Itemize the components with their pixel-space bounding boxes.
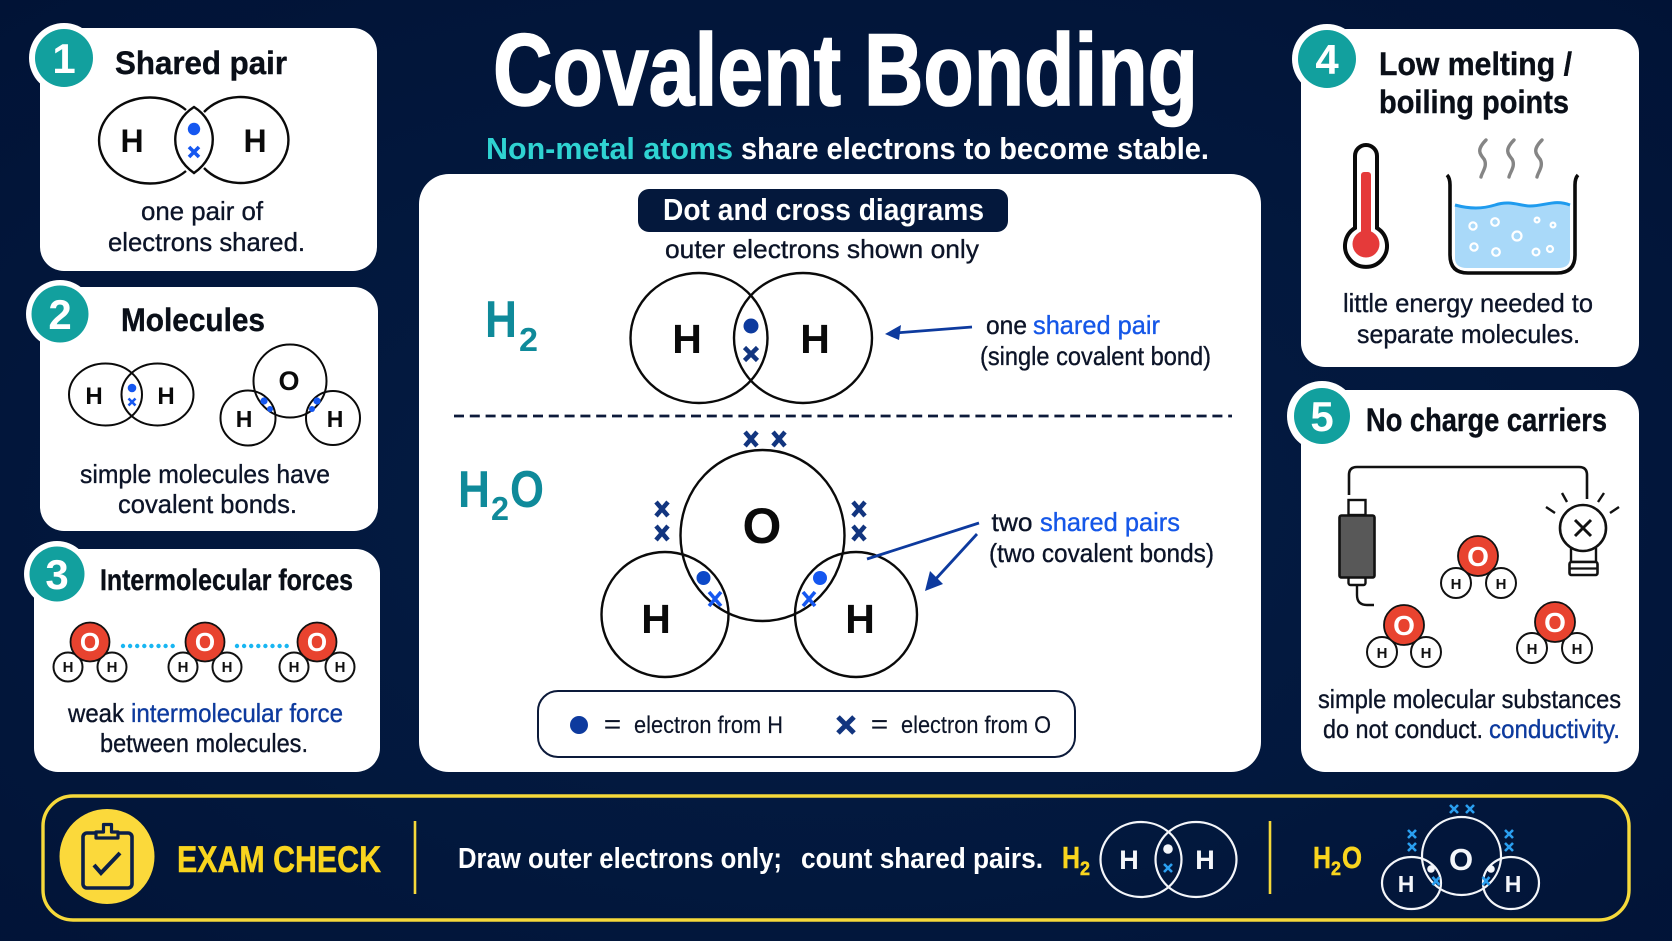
label: H2O bbox=[458, 461, 544, 527]
molecules: water: O bbox=[1393, 610, 1415, 641]
subtitle bbox=[486, 131, 1209, 166]
heading: low melting: boiling points bbox=[1379, 84, 1569, 120]
panel: 5 no charge carriers bbox=[1287, 381, 1639, 772]
label: H2: H bbox=[485, 291, 517, 349]
text: weak force bbox=[67, 698, 343, 758]
legend: electron from H bbox=[634, 712, 783, 739]
label: H2O: 2 bbox=[491, 490, 509, 527]
text: weak force: weak bbox=[67, 698, 125, 728]
badge 4: 4 bbox=[1315, 36, 1339, 83]
annotation: one shared pair bbox=[980, 310, 1211, 371]
annotation: one shared pair: one bbox=[986, 310, 1027, 340]
label: H2O: O bbox=[510, 461, 544, 519]
heading: low melting: Low melting / bbox=[1379, 46, 1572, 82]
diagram: mini H2O: H bbox=[1505, 871, 1521, 897]
text: little energy bbox=[1343, 288, 1593, 349]
diagram: small H2O bbox=[220, 344, 360, 446]
panel: 3 intermolecular forces bbox=[24, 541, 380, 772]
legend: electron from O bbox=[901, 712, 1051, 739]
text: little energy: little energy needed to bbox=[1343, 288, 1593, 318]
diagram: H2O dot and cross: H bbox=[641, 596, 671, 642]
heading: molecules: Molecules bbox=[121, 302, 265, 338]
icon: steam bbox=[1480, 140, 1542, 177]
molecules: water: H bbox=[1377, 645, 1387, 662]
diagram: small H2 bbox=[69, 364, 194, 426]
label: H2O yellow: O bbox=[1342, 840, 1362, 875]
molecules row with dotted forces: O bbox=[307, 627, 327, 657]
molecules row with dotted forces bbox=[54, 622, 354, 682]
diagram: H2O dot and cross bbox=[602, 432, 917, 677]
text: weak force: intermolecular force bbox=[131, 698, 343, 728]
text: do not conduct: conductivity. bbox=[1489, 714, 1620, 744]
label: H2O: H bbox=[458, 461, 490, 519]
heading: low melting bbox=[1379, 46, 1572, 120]
diagram: small H2: H bbox=[157, 383, 175, 410]
annotation: two shared pairs: (two covalent bonds) bbox=[989, 538, 1214, 568]
diagram: mini H2O bbox=[1382, 805, 1539, 909]
circuit wire bbox=[1349, 467, 1587, 499]
label: H2 bbox=[485, 291, 538, 358]
annotation: two shared pairs: two bbox=[992, 507, 1032, 537]
arrow: to H2 shared pair bbox=[885, 325, 972, 340]
diagram: small H2O: H bbox=[327, 406, 343, 432]
molecules: water: O bbox=[1467, 541, 1489, 572]
caption: outer electrons: outer electrons shown only bbox=[665, 234, 979, 264]
annotation: one shared pair: (single covalent bond) bbox=[980, 341, 1211, 371]
diagram: mini H2 bbox=[1100, 822, 1236, 897]
label: H2 yellow bbox=[1062, 840, 1090, 880]
diagram: mini H2O: H bbox=[1398, 871, 1414, 897]
text: simple molecules: covalent bonds. bbox=[118, 489, 297, 519]
text: weak force: between molecules. bbox=[100, 728, 308, 758]
molecules row with dotted forces: H bbox=[178, 659, 188, 676]
text: one pair: one pair of bbox=[141, 196, 264, 226]
molecules row with dotted forces: H bbox=[222, 659, 232, 676]
text: exam instructions bbox=[458, 843, 1043, 875]
badge 1 bbox=[29, 23, 99, 93]
exam check bar bbox=[43, 796, 1629, 920]
diagram: H2O dot and cross: O bbox=[743, 498, 781, 554]
text: one pair bbox=[108, 196, 305, 257]
legend bbox=[538, 691, 1075, 757]
panel: 2 molecules bbox=[26, 280, 378, 531]
annotation: two shared pairs bbox=[989, 507, 1214, 568]
heading: intermolecular forces: Intermolecular forces bbox=[100, 564, 353, 597]
annotation: two shared pairs: shared pairs bbox=[1040, 507, 1180, 537]
text: simple molecules: simple molecules have bbox=[80, 459, 330, 489]
molecules row with dotted forces: H bbox=[107, 659, 117, 676]
molecules row with dotted forces: O bbox=[195, 627, 215, 657]
diagram: H2 dot and cross bbox=[630, 273, 872, 403]
badge 3 bbox=[24, 541, 90, 607]
title: Covalent Bonding bbox=[493, 13, 1198, 127]
panel: 1 shared pair bbox=[29, 23, 377, 271]
text: one pair: electrons shared. bbox=[108, 227, 305, 257]
badge 5 bbox=[1287, 381, 1357, 451]
diagram: H2 lens: H bbox=[243, 123, 267, 159]
diagram: H2 lens: H bbox=[120, 123, 144, 159]
icon: clipboard bbox=[60, 809, 154, 904]
molecules row with dotted forces: H bbox=[335, 659, 345, 676]
diagram: small H2O: H bbox=[236, 406, 252, 432]
diagram: H2 dot and cross: H bbox=[800, 316, 830, 362]
label: H2 yellow: 2 bbox=[1080, 859, 1090, 880]
diagram: small H2O: O bbox=[278, 366, 300, 396]
text: exam instructions: Draw outer electrons only; bbox=[458, 843, 782, 875]
badge 2 bbox=[26, 280, 94, 348]
label: exam check: EXAM CHECK bbox=[177, 839, 381, 880]
label: H2: 2 bbox=[519, 321, 538, 358]
heading: shared pair: Shared pair bbox=[115, 45, 287, 81]
label: H2O yellow: 2 bbox=[1331, 859, 1341, 880]
label: H2O yellow bbox=[1313, 840, 1362, 880]
icon: unlit bulb bbox=[1546, 493, 1619, 575]
subtitle: share electrons to become stable. bbox=[741, 131, 1209, 166]
molecules: water: H bbox=[1451, 576, 1461, 593]
molecules: water: H bbox=[1572, 641, 1582, 658]
badge 5: 5 bbox=[1310, 393, 1334, 440]
badge 3: 3 bbox=[45, 551, 69, 598]
label: H2 yellow: H bbox=[1062, 840, 1080, 875]
molecules: water: H bbox=[1496, 576, 1506, 593]
text: little energy: separate molecules. bbox=[1357, 319, 1580, 349]
molecules: water bbox=[1367, 536, 1592, 667]
panel: centre dot and cross diagrams bbox=[419, 174, 1261, 772]
molecules: water: O bbox=[1544, 607, 1566, 638]
legend: = bbox=[871, 709, 888, 739]
diagram: small H2: H bbox=[85, 383, 103, 410]
panel: 4 low melting / boiling points bbox=[1292, 24, 1639, 367]
text: do not conduct: simple molecular substances bbox=[1318, 684, 1621, 714]
molecules row with dotted forces: H bbox=[63, 659, 73, 676]
molecules row with dotted forces: H bbox=[289, 659, 299, 676]
label: H2O yellow: H bbox=[1313, 840, 1331, 875]
icon: battery bbox=[1340, 500, 1374, 605]
molecules: water: H bbox=[1421, 645, 1431, 662]
diagram: mini H2O: O bbox=[1449, 842, 1473, 877]
diagram: H2 lens bbox=[99, 97, 288, 184]
annotation: one shared pair: shared pair bbox=[1033, 310, 1160, 340]
diagram: H2O dot and cross: H bbox=[845, 596, 875, 642]
diagram: mini H2: H bbox=[1195, 845, 1215, 875]
text: do not conduct: do not conduct. bbox=[1323, 714, 1483, 744]
heading pill: Dot and cross diagrams bbox=[663, 192, 984, 227]
icon: beaker of water bbox=[1447, 175, 1578, 273]
icon: thermometer bbox=[1345, 145, 1387, 267]
text: do not conduct bbox=[1318, 684, 1621, 744]
arrows: to H2O shared pairs bbox=[867, 523, 979, 591]
text: simple molecules bbox=[80, 459, 330, 519]
heading: no charge carriers: No charge carriers bbox=[1366, 402, 1607, 438]
diagram: H2 dot and cross: H bbox=[672, 316, 702, 362]
badge 4 bbox=[1292, 24, 1362, 94]
text: exam instructions: count shared pairs. bbox=[801, 843, 1043, 875]
molecules row with dotted forces: O bbox=[80, 627, 100, 657]
subtitle: Non-metal atoms bbox=[486, 131, 733, 166]
legend: = bbox=[604, 709, 621, 739]
diagram: mini H2: H bbox=[1119, 845, 1139, 875]
badge 2: 2 bbox=[48, 291, 72, 338]
molecules: water: H bbox=[1527, 641, 1537, 658]
badge 1: 1 bbox=[52, 35, 76, 82]
